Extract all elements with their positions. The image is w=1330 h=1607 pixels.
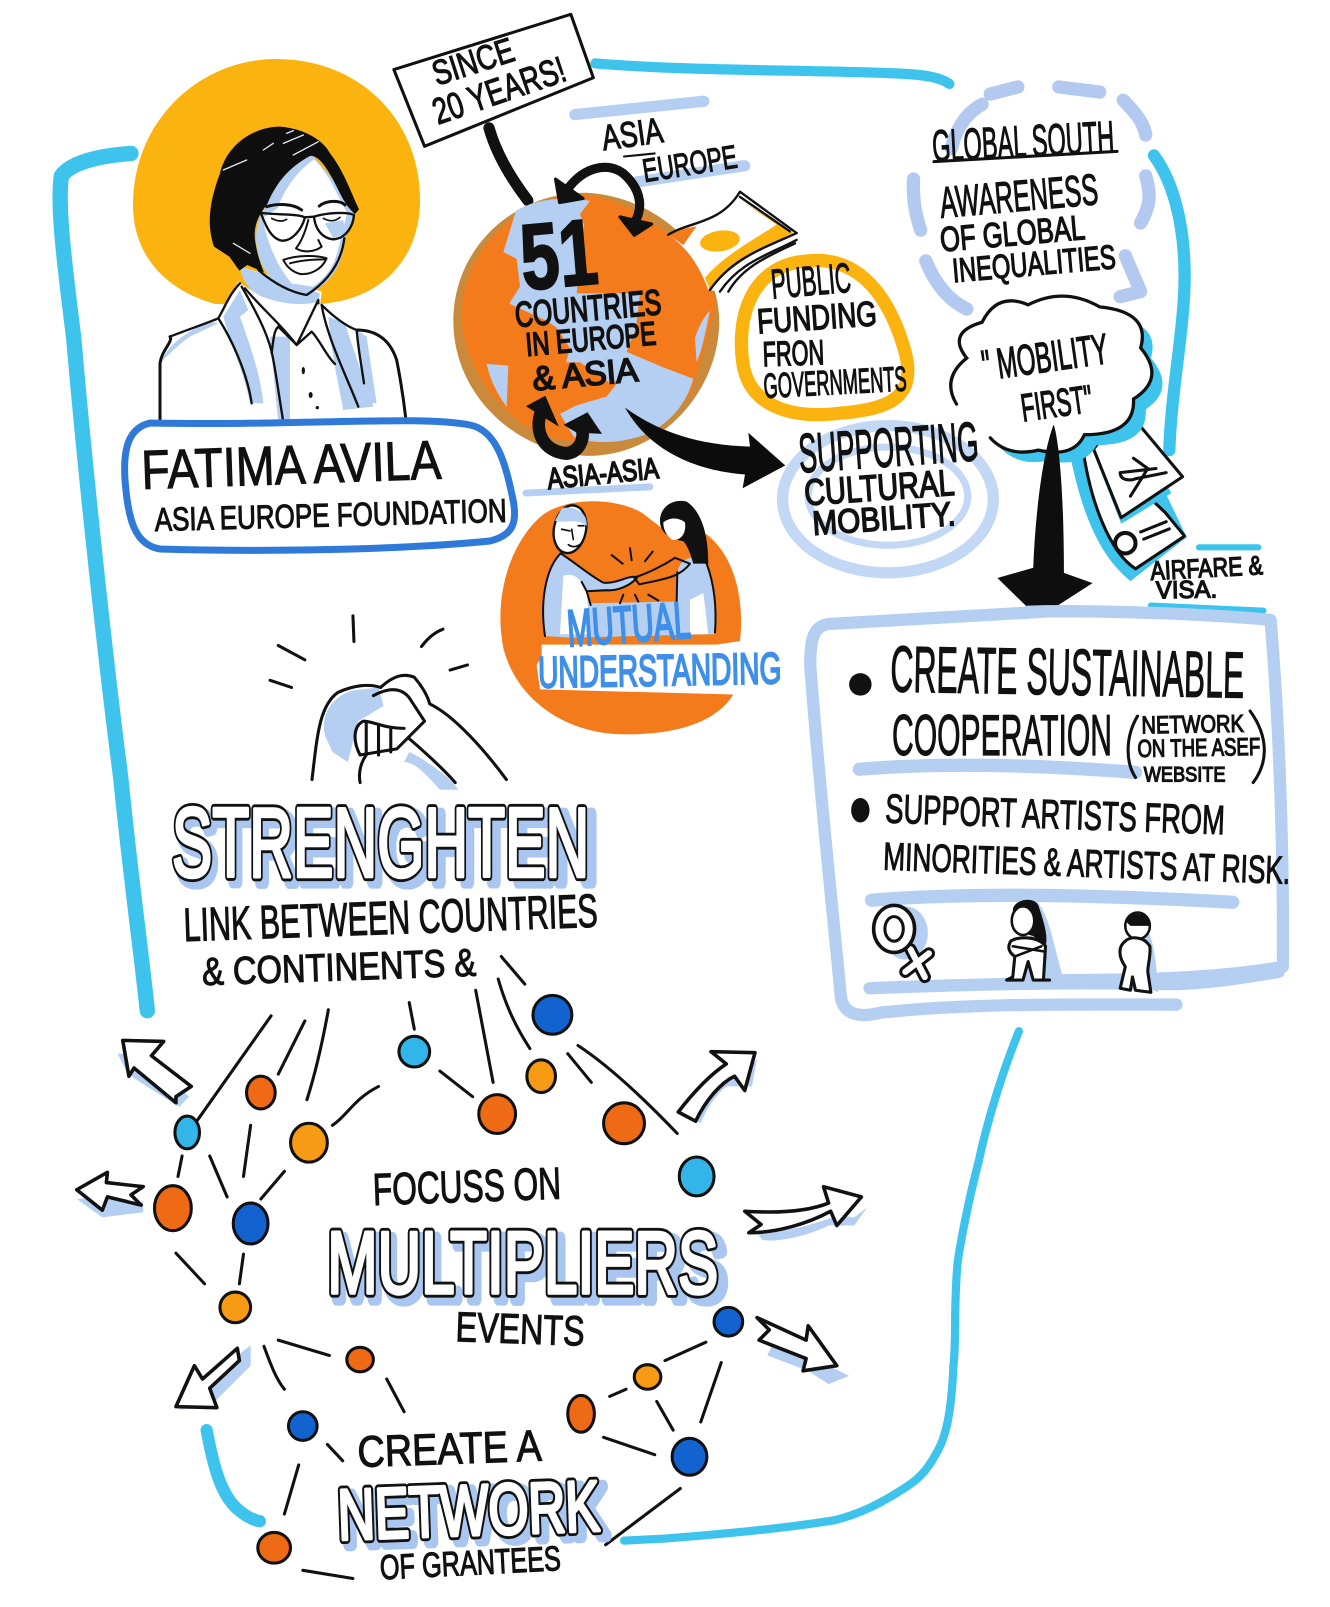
parenthetical note: ON THE ASEF — [1137, 734, 1260, 763]
arrow: left — [77, 1172, 143, 1217]
heading: network: NETWORK — [336, 1467, 601, 1556]
caption: mutual understanding: MUTUAL — [565, 591, 692, 657]
label Asia-Asia — [526, 453, 661, 496]
box: public funding: FUNDING — [756, 295, 878, 341]
bullet — [849, 673, 872, 696]
arrow: down-left — [176, 1345, 251, 1410]
sign: since 20 years: SINCE — [428, 31, 519, 94]
hair — [210, 127, 359, 272]
parenthetical note — [1128, 711, 1264, 787]
circular arrows asia-asia — [539, 410, 583, 453]
parenthetical note: NETWORK — [1141, 711, 1245, 739]
parenthetical note: WEBSITE — [1144, 763, 1226, 787]
icon: man — [1120, 913, 1158, 992]
label: Asia Europe — [575, 101, 745, 189]
white band — [542, 645, 720, 691]
text: awareness of global inequalities — [938, 165, 1117, 290]
name: FATIMA AVILA — [140, 429, 443, 501]
arrow: mobility first down — [997, 425, 1093, 618]
dashed ring: global south — [913, 87, 1149, 309]
globe caption: COUNTRIES — [513, 282, 663, 335]
heading: network: NETWORK — [336, 1467, 601, 1556]
organisation: ASIA EUROPE FOUNDATION — [154, 492, 507, 538]
text: of grantees: OF GRANTEES — [379, 1540, 562, 1588]
cloud: mobility first — [951, 296, 1162, 462]
mouth and nose — [283, 220, 327, 274]
icon: female symbol — [874, 905, 929, 977]
heading: multipliers: MULTIPLIERS — [327, 1213, 718, 1312]
money stack — [668, 192, 797, 292]
caption: mutual understanding — [538, 591, 782, 698]
box: public funding — [741, 254, 908, 415]
caption: airfare and visa — [1150, 547, 1264, 611]
text: awareness of global inequalities: AWARENESS — [938, 165, 1100, 228]
heading: strenghten: STRENGHTEN — [172, 788, 589, 898]
arrow: right-down — [757, 1318, 849, 1384]
heading: strenghten — [172, 788, 597, 903]
box: public funding: PUBLIC — [769, 254, 853, 308]
tickets: airfare and visa — [1069, 408, 1187, 581]
caption: mutual understanding: UNDERSTANDING — [538, 645, 782, 698]
glasses — [261, 201, 354, 241]
heading: cooperation: COOPERATION — [892, 704, 1112, 768]
panel: create sustainable cooperation — [810, 611, 1291, 1015]
plane icon — [1120, 458, 1166, 496]
arrow: right — [745, 1187, 868, 1241]
label: Asia Europe: EUROPE — [640, 138, 740, 189]
highlight — [872, 895, 1233, 902]
arrow to cultural mobility — [625, 408, 785, 488]
arrow: circular Asia-Europe — [555, 167, 652, 235]
burst lines — [270, 616, 468, 687]
heading: multipliers: MULTIPLIERS — [331, 1219, 726, 1318]
cyan frame line: left — [60, 153, 147, 1011]
heading: global south — [931, 111, 1117, 172]
rings: supporting cultural mobility: CULTURAL — [803, 462, 956, 513]
box: public funding: FRON — [762, 334, 825, 374]
handshake disc — [500, 501, 741, 734]
heading: network: NETWORK — [341, 1472, 608, 1561]
cyan frame line: right — [1154, 155, 1185, 450]
figures shaking hands — [543, 501, 716, 638]
box: public funding: GOVERNMENTS — [763, 360, 908, 406]
cloud: mobility first: " MOBILITY — [979, 325, 1111, 390]
portrait: halo — [133, 59, 420, 304]
text: awareness of global inequalities: OF GLOBAL — [939, 209, 1087, 260]
cyan frame line: bottom right — [624, 1031, 1019, 1541]
text: and continents: & CONTINENTS & — [201, 942, 477, 994]
text: create a: CREATE A — [357, 1422, 543, 1477]
jacket — [158, 282, 407, 423]
text: focuss on: FOCUSS ON — [372, 1158, 562, 1215]
number 51: 51 — [516, 200, 601, 310]
label: Asia Europe: ASIA — [599, 110, 666, 158]
rings: supporting cultural mobility: MOBILITY. — [811, 495, 957, 543]
text: events: EVENTS — [455, 1303, 585, 1355]
face — [256, 153, 354, 295]
cyan frame line: bottom left — [207, 1430, 260, 1521]
sign: since 20 years: 20 YEARS! — [427, 49, 571, 132]
heading: multipliers — [327, 1213, 726, 1318]
portrait: Fatima Avila — [158, 127, 407, 423]
sign: since 20 years — [394, 14, 593, 201]
globe: 51 countries: & ASIA — [531, 351, 640, 399]
highlight — [859, 765, 1136, 772]
text: awareness of global inequalities: INEQUALITIES — [951, 238, 1117, 290]
text: link between countries: LINK BETWEEN COUNTRIES — [183, 884, 599, 951]
heading: strenghten: STRENGHTEN — [176, 793, 597, 903]
network lines — [176, 957, 721, 1578]
globe: 51 countries: IN EUROPE — [524, 315, 657, 363]
cloud: mobility first: FIRST" — [1018, 378, 1095, 430]
heading: strenghten: STRENGHTEN — [172, 788, 589, 898]
network nodes — [154, 995, 743, 1563]
rings: supporting cultural mobility — [783, 410, 993, 573]
rings: supporting cultural mobility: SUPPORTING — [796, 410, 980, 485]
label Asia-Asia: ASIA-ASIA — [546, 453, 661, 496]
globe: 51 countries — [453, 192, 797, 734]
cyan frame line: top — [595, 63, 949, 84]
name box: Fatima Avila — [125, 421, 515, 550]
shirt buttons — [302, 367, 319, 409]
jacket lines — [160, 238, 406, 422]
heading: global south: GLOBAL SOUTH — [931, 111, 1115, 172]
bullet — [851, 798, 870, 822]
icon: flexed arms fist — [270, 616, 506, 790]
arrow: up-right — [678, 1052, 757, 1123]
caption: airfare and visa: AIRFARE & — [1150, 550, 1264, 586]
heading: multipliers: MULTIPLIERS — [327, 1213, 718, 1312]
arrow: up-left — [118, 1040, 191, 1107]
neck — [240, 267, 322, 327]
icon: woman with crossed arms — [1007, 900, 1064, 982]
caption: airfare and visa: VISA. — [1156, 576, 1217, 604]
stamp — [1115, 533, 1136, 553]
